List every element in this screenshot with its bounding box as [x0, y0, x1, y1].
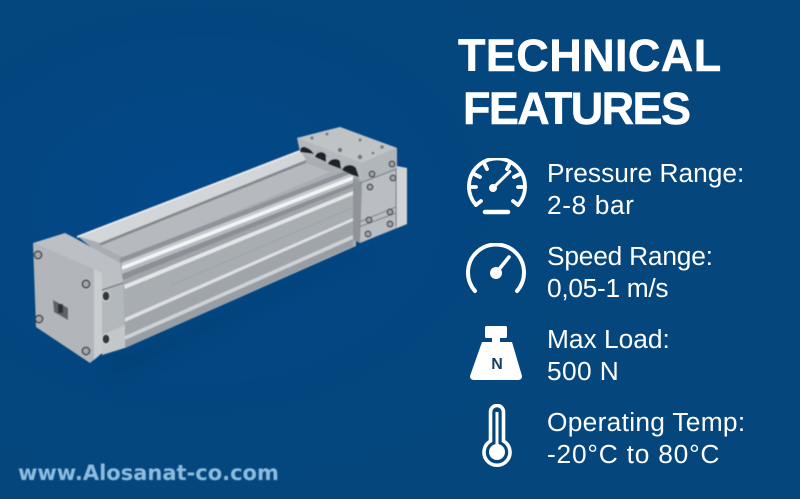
icon: load weight: [470, 326, 522, 380]
icon: pressure gauge: [467, 158, 527, 214]
icon: thermometer: [482, 404, 512, 467]
icon: speed gauge: [466, 243, 526, 294]
speed range text: [547, 241, 713, 302]
website footer: www.Alosanat-co.com: [18, 461, 279, 485]
max load text: 500 N: [547, 356, 619, 386]
max load text: [547, 324, 670, 386]
icon: load weight: N: [491, 356, 503, 373]
speed range text: Speed Range:: [547, 241, 713, 271]
title: TECHNICAL: [458, 30, 722, 81]
port slot: [53, 300, 68, 320]
operating temperature text: -20°C to 80°C: [547, 438, 720, 468]
right end block: [297, 127, 407, 243]
cylinder body: [77, 150, 356, 348]
speed range text: 0,05-1 m/s: [547, 272, 668, 302]
title: [458, 30, 722, 134]
pressure range text: 2-8 bar: [547, 190, 635, 220]
bolts on left face: [34, 251, 90, 355]
operating temperature text: [547, 407, 745, 468]
block bolts: [365, 161, 396, 237]
title: FEATURES: [463, 82, 689, 134]
left end cap: [33, 233, 125, 363]
operating temperature text: Operating Temp:: [547, 407, 745, 437]
side ports: [102, 291, 110, 344]
max load text: Max Load:: [547, 324, 670, 354]
pressure range text: Pressure Range:: [547, 158, 744, 188]
cylinder bore openings: [300, 147, 359, 177]
pressure range text: [547, 158, 744, 220]
